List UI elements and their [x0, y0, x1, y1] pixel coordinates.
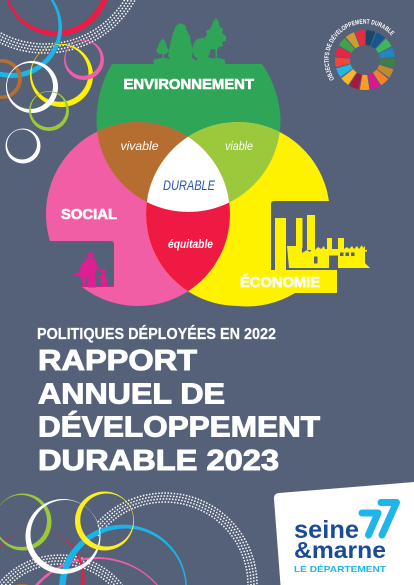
title: DURABLE 2023: [38, 445, 279, 477]
wheel segments: [333, 28, 397, 92]
label: economie: ÉCONOMIE: [240, 274, 320, 291]
circle: environnement: [96, 64, 280, 212]
subtitle: POLITIQUES DÉPLOYÉES EN 2022: [37, 326, 276, 343]
decorative rings top left: [0, 0, 148, 164]
title: [38, 345, 320, 477]
logo card: [274, 482, 414, 585]
overlap: vivable: [97, 122, 188, 202]
icon: factory: [275, 215, 370, 270]
decorative rings bottom left: [0, 491, 257, 585]
title: DÉVELOPPEMENT: [38, 410, 320, 444]
logo wordmark: seine: [294, 516, 359, 544]
overlap: equitable: [146, 136, 230, 292]
label: viable: viable: [225, 141, 253, 153]
card background: [274, 482, 414, 585]
icon: trees above environment circle: [153, 18, 226, 65]
overlap: durable: [146, 136, 230, 212]
label: environnement: ENVIRONNEMENT: [124, 77, 254, 93]
label: social: SOCIAL: [61, 207, 117, 223]
venn diagram: [46, 64, 337, 306]
label: durable: DURABLE: [163, 177, 216, 193]
icon: 77: [362, 502, 396, 535]
title: RAPPORT: [38, 345, 197, 377]
logo tagline: LE DÉPARTEMENT: [294, 564, 387, 574]
circle: economie: [146, 122, 337, 306]
curved caption: OBJECTIFS DE DÉVELOPPEMENT DURABLE: [324, 19, 395, 80]
circle: social: [46, 122, 230, 306]
overlap: viable: [146, 122, 280, 202]
SDG wheel: [324, 19, 395, 90]
logo card: &marne: [294, 537, 386, 563]
title: ANNUEL DE: [38, 378, 225, 410]
label: vivable: vivable: [120, 141, 158, 153]
icon: family: [74, 252, 114, 288]
label: equitable: équitable: [168, 239, 214, 251]
